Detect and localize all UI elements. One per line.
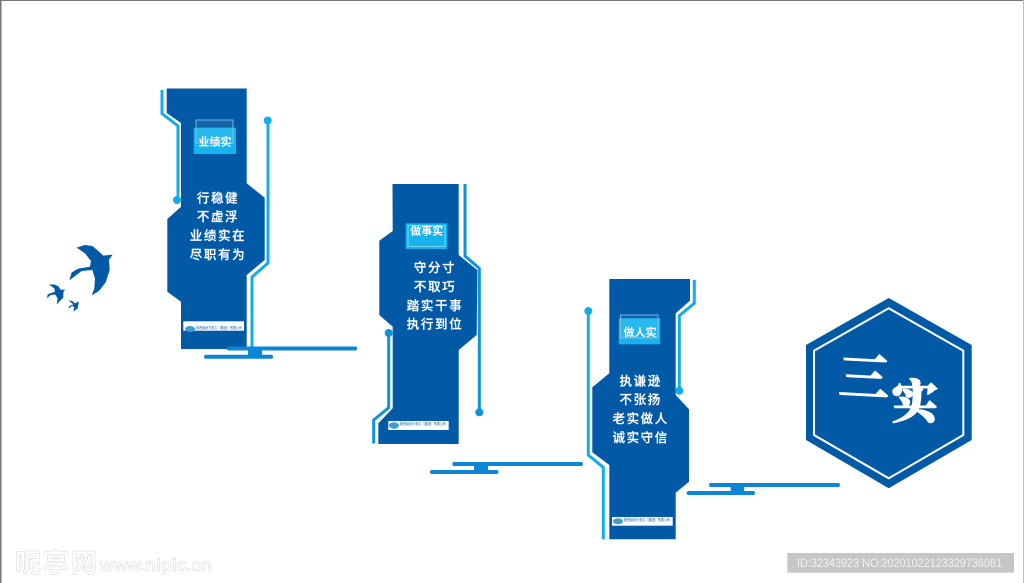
body text: [190, 190, 246, 262]
heading badge: 做人实: [624, 325, 656, 339]
brush title: [837, 338, 941, 432]
right circuit line: [675, 280, 694, 395]
watermark: site name: 昵享网: [15, 548, 99, 578]
body text: 业绩实在: [190, 228, 246, 243]
base stand: [687, 483, 840, 495]
base stand: [204, 346, 357, 359]
body text: 守分寸: [414, 260, 456, 275]
logo strip: 陕西省地方电力（集团）有限公司: [624, 517, 670, 522]
panel 3 body: [592, 279, 690, 539]
right circuit line: [465, 184, 483, 416]
body text: [407, 260, 463, 332]
watermark: image id: [787, 553, 1014, 573]
heading badge: 业绩实: [198, 134, 232, 148]
body text: 不张扬: [620, 392, 662, 407]
body text: 行稳健: [197, 190, 239, 206]
panel: 业绩实: [162, 88, 357, 359]
body text: 执谦逊: [620, 374, 662, 388]
hexagon badge: 三实: [806, 298, 972, 488]
logo strip: 陕西省地方电力（集团）有限公司: [196, 325, 242, 330]
logo strip: [612, 517, 673, 526]
watermark: image id: ID:32343923 NO:20201022123329736081: [797, 556, 1002, 570]
panel: 做事实: [374, 184, 583, 474]
heading badge: [194, 120, 236, 154]
heading badge: [619, 315, 660, 344]
body text: 尽职有为: [190, 248, 246, 262]
body text: 踏实干事: [407, 298, 463, 313]
panel 2 body: [378, 184, 477, 444]
logo strip: 陕西省地方电力（集团）有限公司: [400, 421, 446, 426]
body text: 不取巧: [414, 280, 456, 294]
heading badge: 做事实: [410, 224, 443, 238]
body text: 老实做人: [612, 411, 669, 426]
brush title: 实: [892, 366, 941, 432]
left circuit line: [162, 90, 181, 204]
logo strip: [183, 321, 244, 332]
watermark: site name: www.nipic.cn: [99, 555, 212, 575]
logo strip: [388, 421, 449, 430]
panel 1 body: [167, 88, 265, 349]
right circuit line: [252, 116, 272, 349]
left circuit line: [374, 329, 393, 444]
heading badge: [406, 223, 447, 249]
panel: 做人实: [584, 279, 840, 539]
body text: 不虚浮: [197, 210, 239, 224]
icon: flying birds: [47, 245, 113, 312]
body text: [612, 374, 669, 445]
body text: 执行到位: [407, 316, 463, 332]
body text: 诚实守信: [612, 430, 669, 445]
left circuit line: [584, 307, 603, 539]
watermark: site name: [15, 548, 212, 578]
brush title: 三: [837, 338, 891, 412]
base stand: [430, 462, 583, 474]
